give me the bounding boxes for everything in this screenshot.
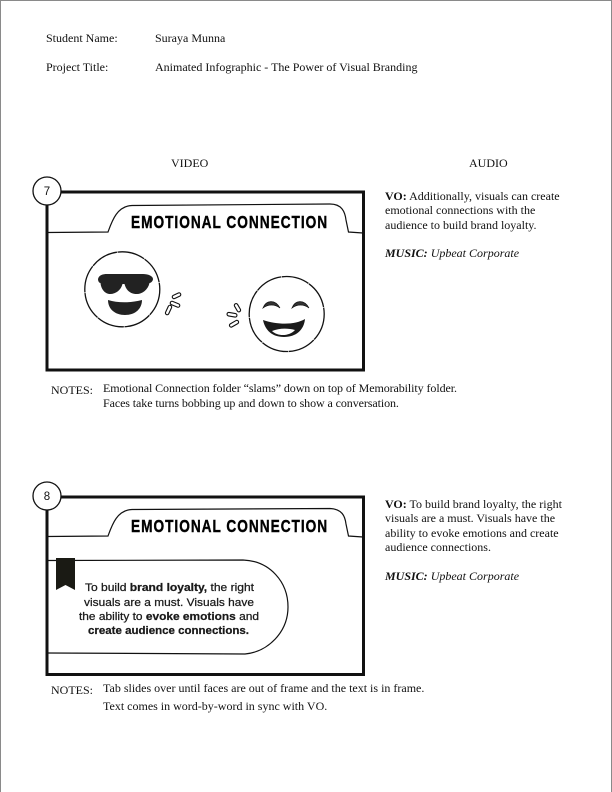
text bubble tab <box>47 560 288 654</box>
frame number 8: 8 <box>44 491 50 503</box>
audio text frame 7: VO: Additionally, visuals can create <box>385 189 560 203</box>
notes frame 8: Tab slides over until faces are out of frame and the text is in frame. <box>103 681 424 695</box>
audio text frame 8: VO: To build brand loyalty, the right <box>385 497 562 511</box>
frame number 7 <box>33 177 61 205</box>
notes frame 8 <box>103 681 424 713</box>
frame number 7: 7 <box>44 186 50 198</box>
bubble text: visuals are a must. Visuals have <box>84 597 254 609</box>
bubble text: the ability to evoke emotions and <box>79 611 258 623</box>
storyboard frame 7 <box>47 192 364 370</box>
project title: Animated Infographic - The Power of Visual Branding <box>155 60 417 74</box>
audio text frame 7 <box>385 189 560 232</box>
notes frame 8: Text comes in word-by-word in sync with VO. <box>103 699 327 713</box>
icon: motion ticks right face <box>227 303 241 328</box>
notes label frame 7: NOTES: <box>51 383 93 397</box>
folder tab 7: EMOTIONAL CONNECTION <box>131 213 328 233</box>
bubble text: create audience connections. <box>88 625 249 637</box>
student name label: Student Name: <box>46 31 118 45</box>
icon: bookmark <box>56 558 75 590</box>
folder tab 8: EMOTIONAL CONNECTION <box>131 517 328 537</box>
audio text frame 8: visuals are a must. Visuals have the <box>385 511 555 525</box>
audio text frame 8: ability to evoke emotions and create <box>385 526 559 540</box>
student name: Suraya Munna <box>155 31 225 45</box>
folder tab 8 <box>47 508 363 537</box>
audio text frame 8: audience connections. <box>385 540 491 554</box>
bubble text: To build brand loyalty, the right <box>85 582 251 594</box>
icon: motion ticks left face <box>165 292 181 315</box>
storyboard frame 8 <box>47 497 364 674</box>
music note frame 8: MUSIC: Upbeat Corporate <box>385 569 519 583</box>
icon: sunglasses face <box>85 252 160 327</box>
frame number 8 <box>33 482 61 510</box>
audio text frame 7: audience to build brand loyalty. <box>385 218 537 232</box>
icon: laughing face <box>249 276 324 352</box>
audio column heading: AUDIO <box>469 156 508 170</box>
project title label: Project Title: <box>46 60 108 74</box>
music note frame 7: MUSIC: Upbeat Corporate <box>385 246 519 260</box>
video column heading: VIDEO <box>171 156 208 170</box>
notes frame 7: Faces take turns bobbing up and down to show a conversation. <box>103 396 399 410</box>
folder tab 7 <box>47 204 363 233</box>
notes frame 7: Emotional Connection folder “slams” down on top of Memorability folder. <box>103 381 457 395</box>
notes frame 7 <box>103 381 457 410</box>
audio text frame 8 <box>385 497 562 554</box>
audio text frame 7: emotional connections with the <box>385 203 535 217</box>
notes label frame 8: NOTES: <box>51 683 93 697</box>
